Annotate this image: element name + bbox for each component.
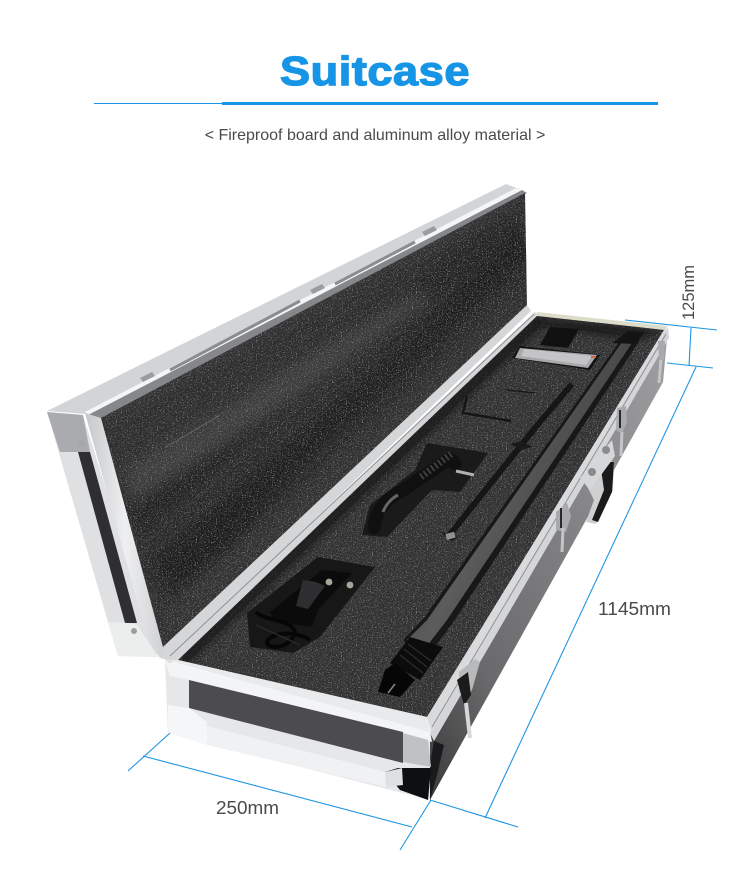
latch: middle right: [616, 406, 627, 456]
T-shaped tool groove: [463, 390, 535, 421]
base front wall: [165, 661, 432, 800]
base rear rail: [165, 312, 540, 663]
lid side wall: [47, 412, 158, 657]
lid top rail: [47, 184, 527, 419]
rod connector: [378, 637, 443, 697]
lid foam lining: [95, 190, 535, 655]
dimension: height 125mm: [625, 320, 717, 366]
main carbon rod: [403, 331, 644, 660]
bracket pocket: [247, 557, 375, 653]
carry handle: [580, 440, 615, 524]
handle pocket: [362, 443, 488, 537]
open lid of the case: [47, 184, 535, 660]
latch: middle left: [556, 503, 571, 552]
label: 250mm: 250mm: [216, 797, 279, 818]
dimension: length 1145mm: [430, 363, 713, 827]
front rim of base: [165, 660, 430, 732]
subtitle: < Fireproof board and aluminum alloy material >: [205, 127, 545, 144]
heading rule: [94, 102, 658, 105]
latch: rear: [658, 341, 665, 383]
latch: front: [457, 659, 480, 738]
lid lower rail: [160, 305, 531, 660]
thin rod groove: [440, 384, 572, 541]
title: Suitcase: [280, 48, 470, 94]
base of the case: [165, 310, 670, 800]
base right side wall: [428, 328, 669, 800]
tablet pocket: [512, 327, 600, 370]
lid front frame: [85, 413, 165, 658]
base rim: [537, 312, 668, 331]
label: 125mm: 125mm: [680, 265, 698, 320]
label: 1145mm: 1145mm: [598, 599, 671, 619]
right rim of base: [427, 328, 668, 732]
dimension: width 250mm: [128, 733, 431, 850]
base foam insert: [170, 310, 670, 730]
